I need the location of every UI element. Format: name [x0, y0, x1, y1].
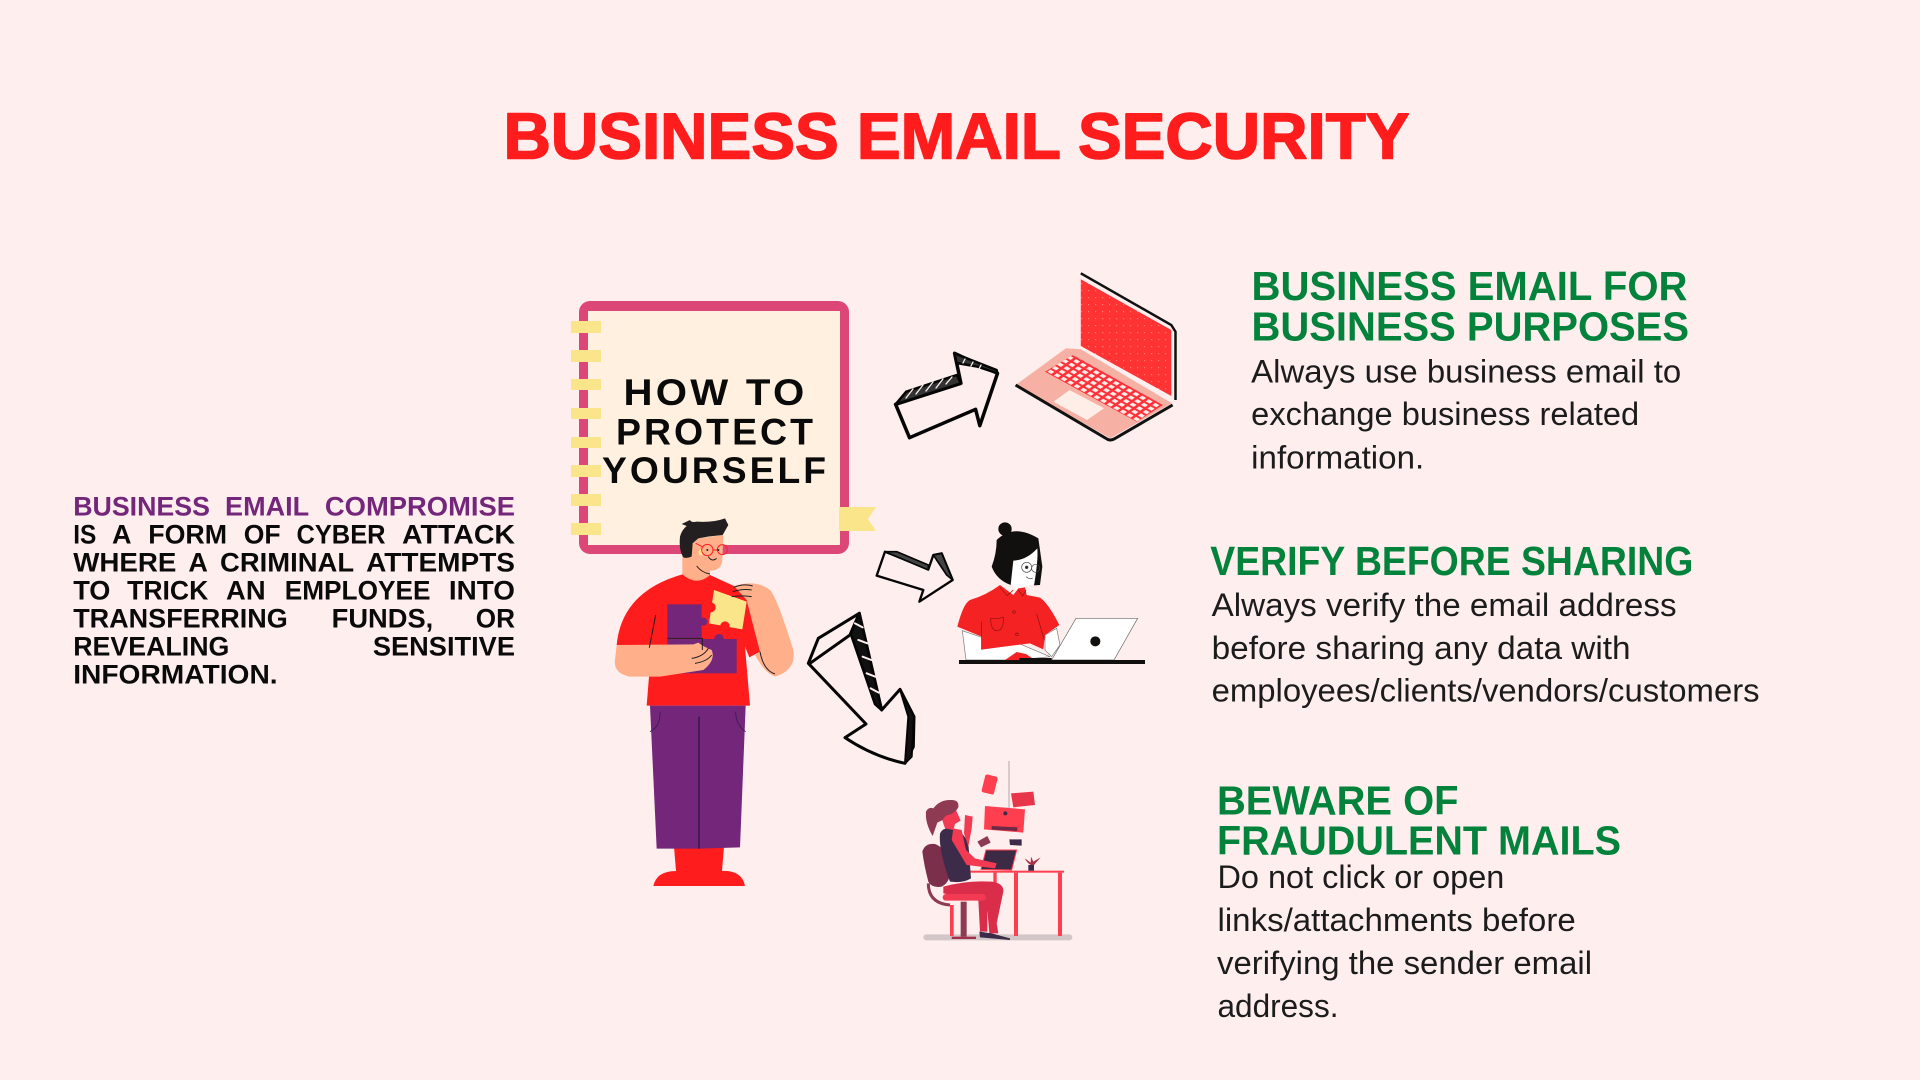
- definition paragraph: CYBER: [296, 520, 386, 550]
- definition paragraph: TRANSFERRING: [73, 603, 288, 633]
- definition paragraph: [73, 520, 515, 690]
- definition paragraph: OR: [476, 603, 515, 633]
- tip 2: verify before sharing: [1210, 538, 1760, 709]
- tip 3 heading: [1217, 777, 1621, 863]
- arrow: to laptop: [896, 353, 998, 438]
- tip 2 body: [1212, 587, 1760, 709]
- woman arms: [962, 628, 1060, 660]
- woman face: [1010, 548, 1041, 594]
- definition paragraph: EMPLOYEE: [285, 575, 431, 605]
- tip 1: business email for business purposes: [1251, 263, 1689, 475]
- hook line: [1007, 761, 1010, 808]
- heading: business email compromise: BUSINESS: [73, 492, 210, 522]
- tip 1 body: Always use business email to: [1251, 353, 1681, 389]
- illustration: woman at laptop: [957, 522, 1145, 664]
- tip 3 body: address.: [1218, 988, 1338, 1024]
- notebook heading: PROTECT: [616, 411, 816, 452]
- illustration: laptop: [1016, 273, 1176, 440]
- tip 1 body: [1251, 353, 1681, 475]
- phone card: [981, 774, 998, 795]
- laptop bottom edge: [1016, 385, 1173, 440]
- laptop base: [1016, 348, 1172, 438]
- yellow puzzle piece: [706, 590, 747, 631]
- small card: [977, 836, 991, 847]
- illustration: man holding puzzle pieces: [615, 518, 794, 886]
- man glasses and smile: [696, 543, 727, 574]
- text block: business email compromise definition: [73, 492, 515, 690]
- tip 3 body: links/attachments before: [1218, 902, 1576, 938]
- tip 2 heading: VERIFY BEFORE SHARING: [1210, 538, 1693, 584]
- man trousers: [650, 706, 746, 849]
- floor shadow: [923, 934, 1072, 940]
- notebook panel: how to protect yourself: [571, 301, 876, 554]
- tip 1 heading: BUSINESS EMAIL FOR: [1252, 263, 1688, 309]
- definition paragraph: TO: [73, 575, 110, 605]
- tip 3 heading: FRAUDULENT MAILS: [1217, 817, 1621, 863]
- man hair: [680, 518, 728, 558]
- plant: [1025, 857, 1041, 871]
- tip 3 heading: BEWARE OF: [1217, 777, 1458, 823]
- definition paragraph: A: [112, 520, 132, 550]
- man left arm: [615, 643, 713, 677]
- title: BUSINESS EMAIL SECURITY: [504, 100, 1410, 172]
- heading: business email compromise: COMPROMISE: [325, 492, 515, 522]
- phishing envelope: [984, 806, 1025, 833]
- man legs and shoes: [653, 847, 745, 886]
- definition paragraph: OF: [244, 520, 281, 550]
- notebook heading: HOW TO: [624, 372, 808, 413]
- definition paragraph: AN: [226, 575, 266, 605]
- notebook cover: [579, 301, 849, 554]
- notebook heading: YOURSELF: [602, 450, 829, 491]
- definition paragraph: FORM: [148, 520, 227, 550]
- definition paragraph: SENSITIVE: [373, 632, 515, 662]
- heading: business email compromise: [73, 492, 515, 522]
- woman torso: [940, 828, 971, 882]
- purple puzzle piece: [667, 604, 737, 673]
- woman hair: [992, 522, 1042, 585]
- definition paragraph: WHERE: [73, 548, 176, 578]
- desk: [950, 871, 1064, 936]
- definition paragraph: TRICK: [127, 575, 208, 605]
- desk: [959, 658, 1145, 664]
- tip 3 body: Do not click or open: [1218, 859, 1504, 895]
- illustration: woman receiving phishing mail: [922, 761, 1072, 940]
- tip 1 heading: BUSINESS PURPOSES: [1252, 304, 1689, 350]
- definition paragraph: A: [188, 548, 208, 578]
- tip 2 body: Always verify the email address: [1212, 587, 1677, 623]
- woman arm: [952, 828, 997, 868]
- woman raised hand: [964, 815, 973, 847]
- woman glasses and shirt details: [982, 562, 1044, 649]
- definition paragraph: ATTEMPTS: [366, 548, 515, 578]
- woman shirt hem: [1005, 652, 1035, 660]
- notebook page: [588, 311, 840, 545]
- definition paragraph: REVEALING: [73, 632, 229, 662]
- laptop lid edge: [1081, 273, 1176, 400]
- trouser seams: [650, 712, 746, 849]
- definition paragraph: CRIMINAL: [220, 548, 354, 578]
- tip 1 body: exchange business related: [1251, 396, 1639, 432]
- man right arm: [732, 583, 794, 677]
- woman shirt: [957, 585, 1059, 649]
- chair: [922, 844, 976, 939]
- notebook ribbon: [839, 507, 876, 531]
- definition paragraph: ATTACK: [402, 520, 515, 550]
- tip 3 body: [1217, 859, 1592, 1024]
- definition paragraph: FUNDS,: [332, 603, 433, 633]
- tip 2 body: employees/clients/vendors/customers: [1212, 673, 1760, 709]
- notebook rings: [571, 321, 601, 535]
- laptop screen: [1081, 279, 1171, 396]
- tip 1 heading: [1252, 263, 1689, 350]
- man line details: [649, 585, 775, 674]
- tip 2 body: before sharing any data with: [1212, 630, 1631, 666]
- woman hair: [926, 800, 958, 836]
- chair seat: [943, 894, 986, 901]
- definition paragraph: INFORMATION.: [73, 660, 278, 690]
- definition paragraph: IS: [73, 520, 96, 550]
- laptop touchpad: [1054, 390, 1104, 420]
- notebook heading: [602, 372, 829, 491]
- woman shoes: [979, 932, 1010, 940]
- tip 3: beware of fraudulent mails: [1217, 777, 1621, 1024]
- laptop logo: [1090, 636, 1100, 646]
- tip 1 body: information.: [1251, 439, 1424, 475]
- arrow: to woman at desk: [877, 552, 953, 602]
- tip 3 body: verifying the sender email: [1217, 945, 1592, 981]
- woman legs: [943, 881, 1003, 933]
- small dark envelope: [1009, 839, 1022, 846]
- laptop keyboard: [1045, 355, 1163, 422]
- definition paragraph: INTO: [449, 575, 515, 605]
- laptop: [981, 850, 1017, 870]
- folder: [1011, 792, 1035, 807]
- woman head: [942, 810, 961, 830]
- heading: business email compromise: EMAIL: [225, 492, 309, 522]
- man shirt: [617, 574, 760, 706]
- man face and neck: [682, 535, 723, 581]
- woman laptop: [1052, 618, 1138, 660]
- arrow: large, to phishing illustration: [808, 613, 914, 763]
